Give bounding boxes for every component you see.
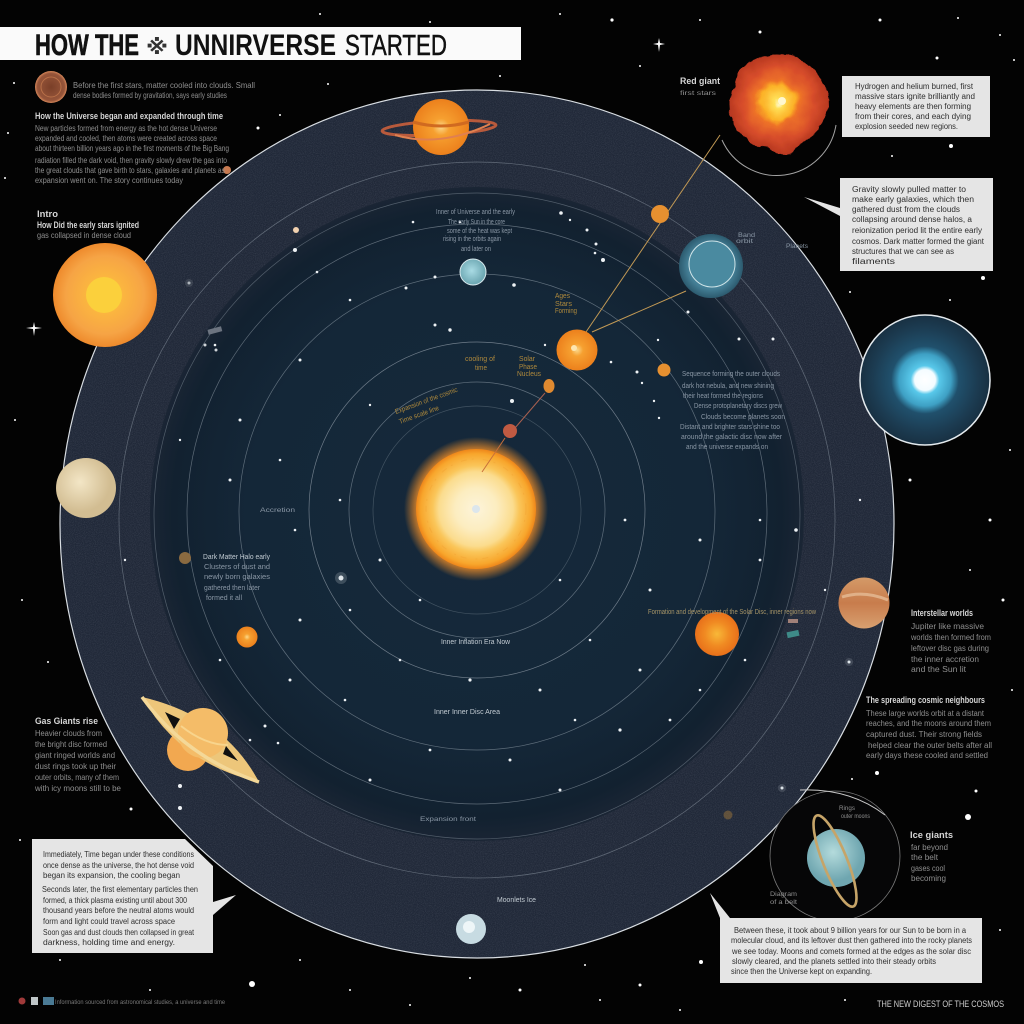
callout box: bottom right: molecular cloud, and its leftover dust then gathered into the rocky planets [731, 936, 972, 945]
label: red star [680, 76, 720, 97]
text block: left lower: Heavier clouds from [35, 729, 102, 738]
footer: left icons and note: Information sourced from astronomical studies, a universe and time [55, 999, 225, 1006]
gold labels: Time scale line [398, 405, 440, 426]
title banner: STARTED [345, 30, 447, 62]
callout box: red star: explosion seeded new regions. [855, 122, 958, 131]
callout box: red star: from their cores, and each dying [855, 112, 971, 121]
text block: intro: expansion went on. The story continues today [35, 176, 183, 185]
callout box: red star: heavy elements are then forming [855, 102, 971, 111]
orbit rings [119, 162, 835, 878]
text block: right in disc: Clouds become planets soon [701, 414, 785, 421]
text block: left heading small: Intro [37, 209, 59, 219]
gold labels [394, 293, 817, 616]
title banner: UNNIRVERSE [175, 29, 336, 62]
labels: teal planet: Band [738, 233, 755, 239]
callout box: bottom left: Immediately, Time began under these conditions [43, 850, 194, 859]
labels in disc: top: and later on [461, 246, 491, 253]
labels in disc: left: Accretion [260, 508, 295, 514]
text block: uranus: far beyond [911, 843, 948, 852]
text block: left lower [34, 716, 122, 793]
text block: right upper: worlds then formed from [910, 633, 991, 642]
planet: mars thumbnail [35, 71, 67, 103]
small spacecraft icons [204, 326, 799, 638]
text block: right in disc: Distant and brighter stars shine too [680, 424, 780, 431]
callout box: early galaxies [804, 178, 993, 271]
callout box: bottom right [710, 893, 982, 983]
callout box: early galaxies: Gravity slowly pulled matter to [852, 185, 967, 194]
text block: mars note: Before the first stars, matter cooled into clouds. Small [73, 81, 255, 90]
labels in disc: bottom: Expansion front [420, 817, 476, 823]
callout box: early galaxies: filaments [852, 257, 895, 266]
text block: right upper [910, 608, 991, 674]
planet: white bottom [456, 914, 486, 944]
labels: teal planet: orbit [736, 239, 753, 245]
gold labels: Forming [555, 308, 577, 315]
callout box: early galaxies: collapsing around dense halos, a [852, 215, 973, 224]
gold labels: Nucleus [517, 371, 541, 378]
text block: uranus: Ice giants [910, 830, 953, 840]
text block: mars note: dense bodies formed by gravitation, says early studies [73, 91, 227, 100]
text block: left lower: Gas Giants rise [35, 716, 98, 726]
text block: right in disc: Sequence forming the outer clouds [682, 371, 780, 378]
labels in disc: bottom: Inner Inner Disc Area [434, 709, 500, 716]
gold labels: Expansion of the cosmic [394, 387, 459, 416]
text block: mars note [73, 81, 255, 100]
callout box: early galaxies: gathered dust from the clouds [852, 205, 960, 214]
labels: teal planet [736, 233, 808, 250]
labels in disc: bottom: Inner Inflation Era Now [441, 639, 511, 646]
labels in disc: bottom [420, 639, 536, 904]
callout box: bottom left: Soon gas and dust clouds then collapsed in great [43, 928, 195, 937]
text block: right middle: helped clear the outer belts after all [868, 741, 992, 750]
text block: right in disc: dark hot nebula, and new shining [682, 383, 774, 390]
labels: uranus inset: Diagram [770, 892, 797, 898]
callout box: bottom left: darkness, holding time and energy. [43, 938, 175, 947]
inner dark disc [150, 187, 804, 841]
callout box: red star [842, 76, 990, 137]
text block: uranus: becoming [911, 874, 946, 883]
text block: right in disc: around the galactic disc now after [681, 434, 783, 441]
blue star [860, 315, 990, 445]
planet: brown gas giant [838, 578, 890, 628]
text block: intro: How the Universe began and expanded through time [35, 111, 223, 121]
labels in disc: left: gathered then later [204, 585, 261, 592]
text block: right in disc: Dense protoplanetary discs grew [694, 403, 783, 410]
connector lines [482, 135, 720, 472]
labels in disc: top: some of the heat was kept [447, 228, 512, 235]
labels: uranus inset: Rings [839, 806, 855, 812]
icon: sparkle stars [26, 38, 665, 336]
callout box: bottom left [32, 839, 236, 953]
gold labels: cooling of [465, 356, 495, 363]
uranus inset [770, 790, 900, 921]
text block: right upper: Jupiter like massive [911, 622, 985, 631]
callout box: bottom right: since then the Universe kept on expanding. [731, 967, 872, 976]
callout box: early galaxies: cosmos. Dark matter formed the giant [852, 237, 985, 246]
labels in disc: top: The early Sun in the core [448, 219, 505, 226]
gold labels: time [475, 365, 487, 372]
labels in disc: left: Clusters of dust and [204, 564, 270, 571]
text block: intro [35, 111, 229, 185]
text block: right middle: early days these cooled and settled [866, 751, 988, 760]
callout box: red star: Hydrogen and helium burned, first [855, 82, 974, 91]
labels in disc: left [203, 508, 295, 602]
footer: left icons and note [18, 997, 225, 1006]
callout box: bottom right: we see today. Moons and comets formed at the edges as the solar disc [731, 947, 971, 956]
text block: left lower: the bright disc formed [35, 740, 107, 749]
text block: right middle [866, 695, 992, 760]
planet: small bodies [179, 166, 670, 648]
text block: left heading small [37, 209, 139, 240]
gold labels: Solar [519, 356, 536, 363]
labels in disc: top: rising in the orbits again [443, 236, 501, 243]
gold labels: Formation and development of the Solar Disc, inner regions now [648, 609, 817, 616]
labels in disc: top: Inner of Universe and the early [436, 209, 515, 216]
text block: right middle: The spreading cosmic neighbours [866, 695, 985, 705]
text block: intro: New particles formed from energy as the hot dense Universe [35, 124, 217, 133]
labels: teal planet: Planets [786, 244, 808, 250]
text block: intro: about thirteen billion years ago in the first moments of the Big Bang [35, 144, 229, 153]
title banner [0, 27, 521, 62]
text block: uranus: the belt [911, 853, 939, 862]
text block: right upper: the inner accretion [911, 655, 979, 664]
sun [404, 437, 548, 581]
planet: orange center [556, 330, 598, 370]
red star [722, 54, 836, 175]
text block: right in disc: and the universe expands on [686, 444, 768, 451]
labels in disc: left: newly born galaxies [204, 574, 271, 581]
callout box: bottom left: thousand years before the neutral atoms would [43, 906, 194, 915]
text block: left heading small: gas collapsed in dense cloud [37, 231, 131, 240]
gold labels: Ages [555, 293, 570, 300]
callout box: red star: massive stars ignite brilliantly and [855, 92, 975, 101]
planet: cream [56, 458, 116, 518]
text block: intro: expanded and cooled, then atoms were created across space [35, 134, 217, 143]
labels in disc: left: Dark Matter Halo early [203, 554, 270, 561]
callout box: early galaxies: structures that we can see as [852, 247, 954, 256]
text block: intro: radiation filled the dark void, then gravity slowly drew the gas into [35, 156, 227, 165]
planet: orange lower [695, 612, 739, 656]
disc stars [124, 211, 861, 810]
text block: left lower: with icy moons still to be [34, 784, 122, 793]
planet: teal glassy [679, 234, 743, 298]
text block: uranus [910, 830, 953, 883]
text block: right upper: and the Sun lit [911, 665, 967, 674]
text block: right upper: Interstellar worlds [911, 608, 973, 618]
text block: intro: the great clouds that gave birth to stars, galaxies and planets as [35, 166, 225, 175]
text block: right middle: These large worlds orbit at a distant [866, 709, 985, 718]
text block: left lower: dust rings took up their [35, 762, 116, 771]
callout box: bottom left: once dense as the universe, the hot dense void [43, 861, 194, 870]
label: red star: first stars [680, 91, 716, 97]
text block: right middle: reaches, and the moons around them [866, 719, 991, 728]
label: red star: Red giant [680, 76, 720, 86]
text block: left heading small: How Did the early stars ignited [37, 220, 139, 230]
text block: right in disc [680, 371, 785, 451]
callout box: bottom left: Seconds later, the first elementary particles then [42, 885, 198, 894]
star clusters [185, 279, 853, 820]
labels in disc: bottom: Moonlets Ice [497, 897, 536, 904]
callout box: early galaxies: make early galaxies, which then [852, 195, 974, 204]
text block: right in disc: their heat formed the regions [683, 393, 763, 400]
gold labels: Phase [519, 364, 537, 371]
gold labels: Stars [555, 301, 573, 308]
callout box: bottom left: began its expansion, the cooling began [43, 871, 180, 880]
title banner: ※ [146, 35, 168, 59]
text block: right middle: captured dust. Their strong fields [866, 730, 982, 739]
text block: left lower: giant ringed worlds and [35, 751, 115, 760]
callout box: bottom right: slowly cleared, and the planets settled into their steady orbits [732, 957, 936, 966]
labels: uranus inset [770, 806, 870, 906]
labels: uranus inset: of a belt [770, 900, 797, 906]
labels in disc: top [436, 209, 515, 253]
planet: ringed top [382, 99, 496, 155]
planet: ringed saturn [142, 697, 259, 782]
text block: left lower: outer orbits, many of them [35, 773, 119, 782]
callout box: bottom left: formed, a thick plasma existing until about 300 [43, 896, 187, 905]
callout box: bottom right: Between these, it took about 9 billion years for our Sun to be born in a [734, 926, 967, 935]
title banner: HOW THE [35, 29, 139, 62]
labels in disc: left: formed it all [206, 595, 242, 602]
planet: orange gas giant left [53, 243, 157, 347]
callout box: early galaxies: reionization period lit the entire early [852, 226, 982, 235]
callout box: bottom left: form and light could travel across space [43, 917, 176, 926]
text block: right upper: leftover disc gas during [911, 644, 989, 653]
panel: main universe disc [60, 90, 894, 958]
labels: uranus inset: outer moons [841, 814, 870, 820]
text block: uranus: gases cool [911, 864, 945, 873]
